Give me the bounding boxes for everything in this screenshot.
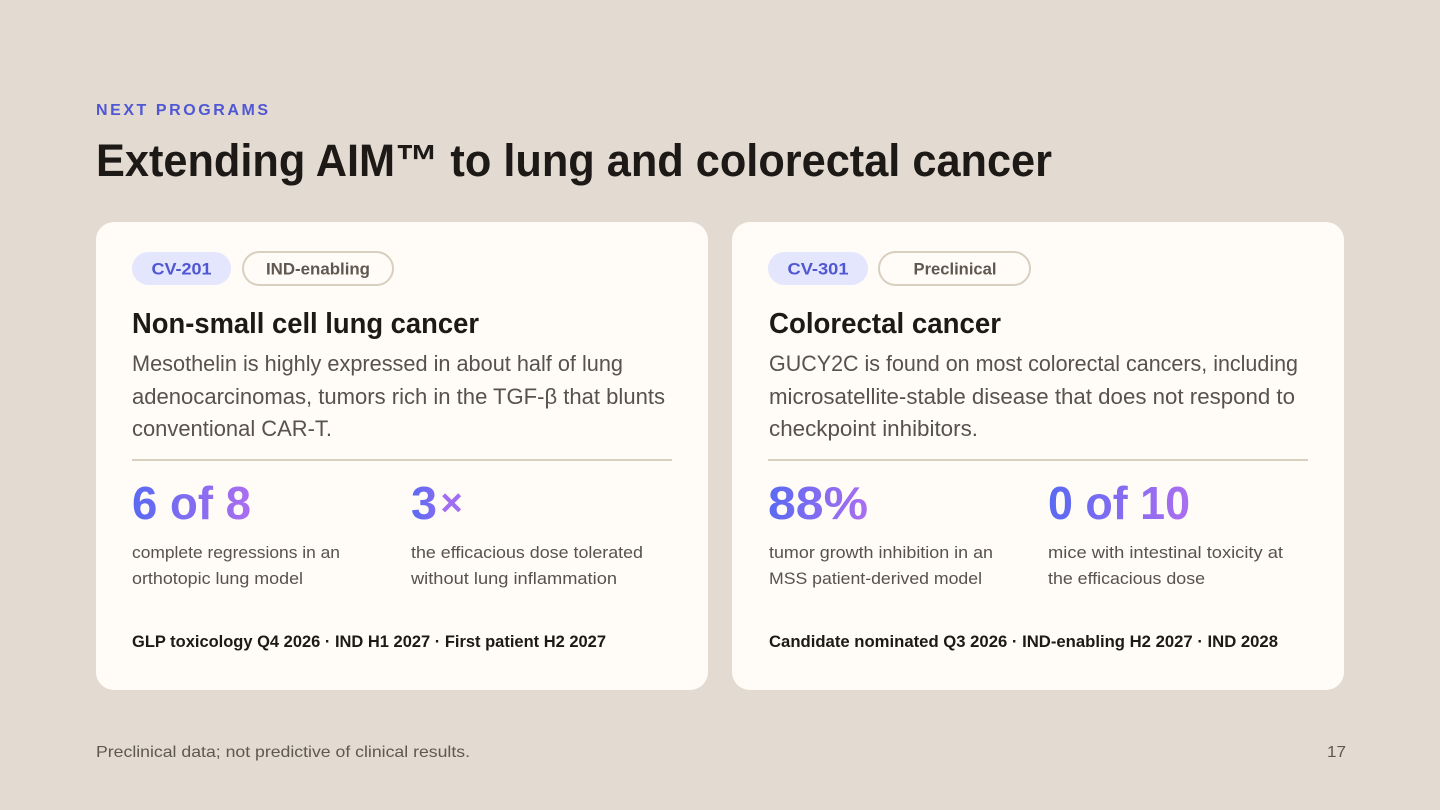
badge: IND-enabling xyxy=(243,252,393,285)
footnote: Preclinical data; not predictive of clinical results. xyxy=(96,744,470,761)
badge: CV-301: CV-301 xyxy=(788,260,848,278)
body text xyxy=(132,351,665,441)
body text: Mesothelin is highly expressed in about half of lung xyxy=(132,351,623,376)
stat: 3x xyxy=(410,477,643,588)
milestones: GLP toxicology Q4 2026 · IND H1 2027 · First patient H2 2027 xyxy=(132,632,606,651)
badge: CV-201: CV-201 xyxy=(152,260,212,278)
body text: microsatellite-stable disease that does not respond to xyxy=(769,384,1295,409)
badge: Preclinical xyxy=(879,252,1030,285)
page number: 17 xyxy=(1327,744,1346,761)
stat: 6 of 8: complete regressions in an xyxy=(132,543,340,562)
stat: 6 of 8 xyxy=(132,477,340,588)
badge: CV-301 xyxy=(768,252,868,285)
body text: adenocarcinomas, tumors rich in the TGF-β that blunts xyxy=(132,384,665,409)
stat: 0 of 10: mice with intestinal toxicity at xyxy=(1048,543,1283,562)
stat: 6 of 8: 6 of 8 xyxy=(132,477,251,529)
stat: 3x: × xyxy=(440,482,463,524)
milestones: Candidate nominated Q3 2026 · IND-enabling H2 2027 · IND 2028 xyxy=(769,632,1278,651)
stat: 0 of 10: 0 of 10 xyxy=(1048,477,1190,529)
stat: 0 of 10 xyxy=(1048,477,1283,588)
stat: 3x: 3 xyxy=(411,477,437,529)
body text: checkpoint inhibitors. xyxy=(769,416,978,441)
stat: 88%: MSS patient-derived model xyxy=(769,569,982,588)
stat: 6 of 8: orthotopic lung model xyxy=(132,569,303,588)
eyebrow: next programs: NEXT PROGRAMS xyxy=(96,102,268,119)
stat: 88%: tumor growth inhibition in an xyxy=(769,543,993,562)
panel: CV-301 colorectal cancer card xyxy=(732,222,1344,690)
badge: Preclinical: Preclinical xyxy=(914,260,996,278)
heading: non-small cell lung cancer: Non-small cell lung cancer xyxy=(132,308,479,340)
body text xyxy=(769,351,1298,441)
stat: 0 of 10: the efficacious dose xyxy=(1048,569,1205,588)
title: Extending AIM™ to lung and colorectal cancer xyxy=(96,135,1052,186)
heading: colorectal cancer: Colorectal cancer xyxy=(769,308,1001,340)
stat: 3x: without lung inflammation xyxy=(410,569,617,588)
body text: conventional CAR-T. xyxy=(132,416,332,441)
badge: CV-201 xyxy=(132,252,231,285)
stat: 88% xyxy=(768,477,993,588)
stat: 3x: the efficacious dose tolerated xyxy=(411,543,643,562)
panel: CV-201 lung cancer card xyxy=(96,222,708,690)
badge: IND-enabling: IND-enabling xyxy=(266,260,370,278)
body text: GUCY2C is found on most colorectal cancers, including xyxy=(769,351,1298,376)
stat: 88%: 88% xyxy=(768,477,868,529)
